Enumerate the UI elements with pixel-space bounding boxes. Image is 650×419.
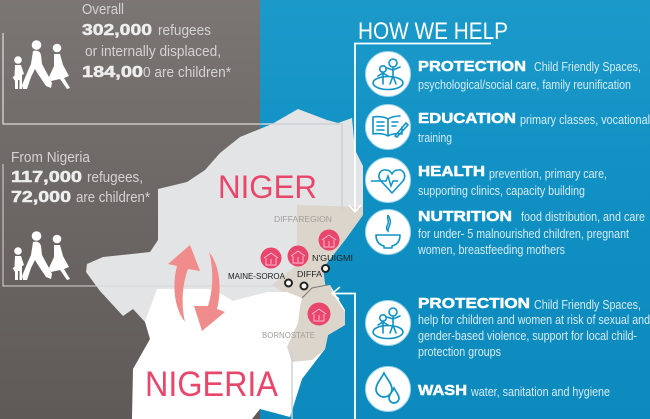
map labels: MAINE-SOROA	[228, 271, 285, 281]
map dots: towns	[285, 265, 329, 290]
text: protection: PROTECTION	[418, 59, 526, 75]
text: health: HEALTH	[418, 164, 485, 180]
connector lines over map	[262, 124, 342, 419]
text: wash	[418, 383, 610, 399]
text: wash: water, sanitation and hygiene	[470, 384, 610, 399]
icon circle: education	[366, 104, 410, 150]
stat block: from Nigeria	[11, 150, 150, 206]
label: Nigeria: NIGERIA	[145, 365, 279, 404]
map region: Nigeria	[132, 285, 345, 419]
stat block: overall: 184,00	[82, 64, 143, 81]
heading: how we help: HOW WE HELP	[358, 18, 508, 45]
map region: Borno state	[287, 285, 345, 362]
icon circle: protection	[366, 52, 410, 96]
icon circle: wash	[366, 366, 410, 412]
map labels: N'GUIGMI	[312, 253, 353, 263]
stat block: overall: Overall	[82, 2, 124, 18]
stat block: overall: refugees	[158, 23, 211, 39]
text: nutrition: NUTRITION	[418, 209, 512, 225]
stat block: from Nigeria: 72,000	[11, 189, 71, 206]
text: health: prevention, primary care,	[489, 166, 607, 181]
stat block: from Nigeria: From Nigeria	[11, 150, 91, 166]
stat block: overall: 0 are children*	[143, 65, 231, 81]
icon: family walking bottom	[12, 231, 70, 280]
text: wash: WASH	[418, 383, 467, 399]
map pins: shelter markers	[260, 230, 340, 326]
map labels: BORNOSTATE	[262, 330, 315, 340]
text: protection 2: protection groups	[418, 344, 501, 359]
icon: family walking top	[12, 40, 70, 89]
icon circle: nutrition	[366, 210, 410, 254]
map region: Niger	[86, 109, 363, 322]
map region: Diffa	[272, 205, 363, 300]
background: grey left panel	[0, 0, 262, 419]
map labels	[228, 214, 353, 340]
text: protection 2	[418, 296, 650, 359]
text: health: supporting clinics, capacity building	[418, 183, 585, 198]
map of Niger and Nigeria	[86, 109, 363, 419]
stat block: from Nigeria: are children*	[76, 190, 150, 206]
stat block: from Nigeria: 117,000	[11, 169, 82, 186]
map labels: DIFFAREGION	[274, 214, 332, 224]
text: health	[418, 164, 607, 198]
label: Niger: NIGER	[218, 169, 317, 205]
map labels: DIFFA	[297, 269, 322, 279]
stat block: overall: or internally displaced,	[85, 44, 221, 60]
border line	[302, 285, 327, 298]
stat block: overall: 302,000	[82, 22, 152, 39]
background: blue right panel	[260, 0, 650, 419]
text: education	[418, 111, 650, 145]
text: education: training	[418, 130, 452, 145]
stat block: overall	[82, 2, 231, 81]
arrow: down curved	[194, 252, 225, 331]
bracket line with arrow to Diffa	[349, 44, 491, 212]
icon circle: health	[366, 158, 410, 202]
icon circle: protection 2	[366, 300, 410, 346]
text: protection 2: PROTECTION	[418, 296, 530, 312]
bracket line with arrow to Borno	[332, 287, 355, 419]
arrow: up curved	[168, 245, 200, 322]
stat block: from Nigeria: refugees,	[87, 170, 143, 186]
text: nutrition	[417, 209, 645, 257]
text: protection	[418, 59, 641, 92]
connector lines to left stats	[3, 33, 290, 286]
text: nutrition: women, breastfeeding mothers	[417, 242, 565, 257]
text: education: EDUCATION	[418, 111, 516, 127]
